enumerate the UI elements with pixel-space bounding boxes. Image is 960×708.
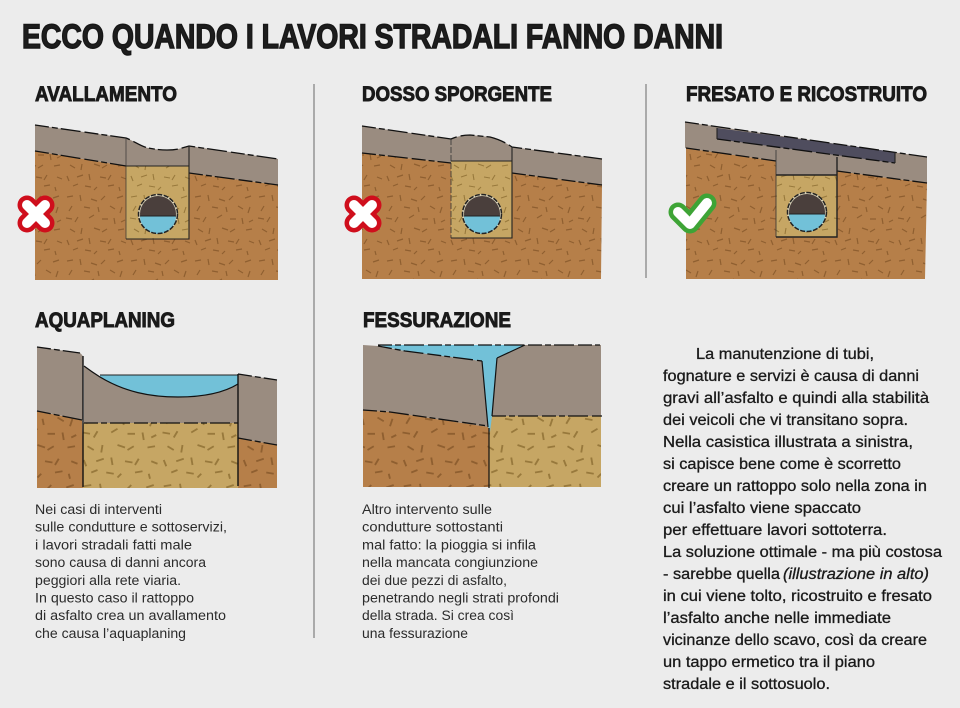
text: fessurazione description: condutture sottostanti (362, 520, 503, 535)
text block: manutenzione explanation (663, 346, 942, 693)
illustration: avallamento cross-section (35, 125, 278, 280)
text: aquaplaning description: peggiori alla rete viaria. (35, 573, 181, 588)
text block: manutenzione explanation: in cui viene tolto, ricostruito e fresato (663, 588, 932, 605)
text block: manutenzione explanation: (illustrazione in alto) (783, 566, 929, 583)
text block: manutenzione explanation: vicinanze dello scavo, così da creare (663, 632, 927, 649)
text: fessurazione description: Altro intervento sulle (362, 502, 492, 517)
panel: fresato e ricostruito (678, 83, 927, 279)
icon: red cross (27, 205, 45, 223)
text block: manutenzione explanation: un tappo ermetico tra il piano (663, 654, 875, 671)
text block: manutenzione explanation: gravi all’asfalto e quindi alla stabilità (663, 390, 929, 407)
panel: aquaplaning (35, 309, 277, 641)
text: aquaplaning description: i lavori stradali fatti male (35, 537, 192, 552)
text block: manutenzione explanation: stradale e il sottosuolo. (663, 676, 830, 693)
text: aquaplaning description: sulle condutture e sottoservizi, (35, 520, 227, 535)
panel: fessurazione (362, 309, 602, 641)
panel: dosso sporgente (354, 83, 602, 279)
text: aquaplaning description: che causa l’aquaplaning (35, 626, 186, 641)
text: aquaplaning description (35, 502, 227, 641)
text block: manutenzione explanation: cui l’asfalto viene spaccato (663, 500, 861, 517)
heading: aquaplaning: AQUAPLANING (35, 309, 175, 332)
text block: manutenzione explanation: La soluzione ottimale - ma più costosa (663, 544, 942, 561)
illustration: fresato cross-section (685, 122, 927, 279)
text block: manutenzione explanation: Nella casistica illustrata a sinistra, (663, 434, 913, 451)
text block: manutenzione explanation: La manutenzione di tubi, (696, 346, 874, 363)
heading: dosso sporgente: DOSSO SPORGENTE (362, 83, 552, 106)
text: fessurazione description: una fessurazione (362, 626, 468, 641)
text: fessurazione description (362, 502, 559, 641)
icon: green check (678, 203, 707, 224)
illustration: aquaplaning cross-section (37, 347, 277, 488)
text: aquaplaning description: sono causa di danni ancora (35, 555, 207, 570)
text block: manutenzione explanation: l’asfalto anche nelle immediate (663, 610, 891, 627)
text: aquaplaning description: di asfalto crea un avallamento (35, 608, 226, 623)
panel: avvallamento (27, 83, 278, 280)
text block: manutenzione explanation: fognature e servizi è causa di danni (663, 368, 919, 385)
heading: fresato e ricostruito: FRESATO E RICOSTRUITO (686, 83, 927, 106)
text: fessurazione description: dei due pezzi di asfalto, (362, 573, 507, 588)
illustration: dosso cross-section (362, 126, 602, 279)
text: fessurazione description: penetrando negli strati profondi (362, 590, 559, 606)
text: fessurazione description: nella mancata congiunzione (362, 555, 538, 570)
text block: manutenzione explanation: si capisce bene come è scorretto (663, 456, 901, 473)
text block: manutenzione explanation: dei veicoli che vi transitano sopra. (663, 412, 908, 429)
heading: fessurazione: FESSURAZIONE (363, 309, 511, 332)
heading: avallamento: AVALLAMENTO (35, 83, 177, 106)
text block: manutenzione explanation: - sarebbe quella (663, 566, 780, 583)
text: aquaplaning description: In questo caso il rattoppo (35, 590, 194, 606)
icon: red cross (354, 205, 372, 223)
text: aquaplaning description: Nei casi di interventi (35, 502, 162, 517)
illustration: fessurazione cross-section (363, 345, 602, 488)
text: fessurazione description: mal fatto: la pioggia si infila (362, 537, 537, 552)
text block: manutenzione explanation: per effettuare lavori sottoterra. (663, 522, 887, 539)
title: ECCO QUANDO I LAVORI STRADALI FANNO DANNI (22, 18, 723, 56)
text: fessurazione description: della strada. Si crea così (362, 608, 514, 623)
text block: manutenzione explanation: creare un rattoppo solo nella zona in (663, 478, 927, 495)
